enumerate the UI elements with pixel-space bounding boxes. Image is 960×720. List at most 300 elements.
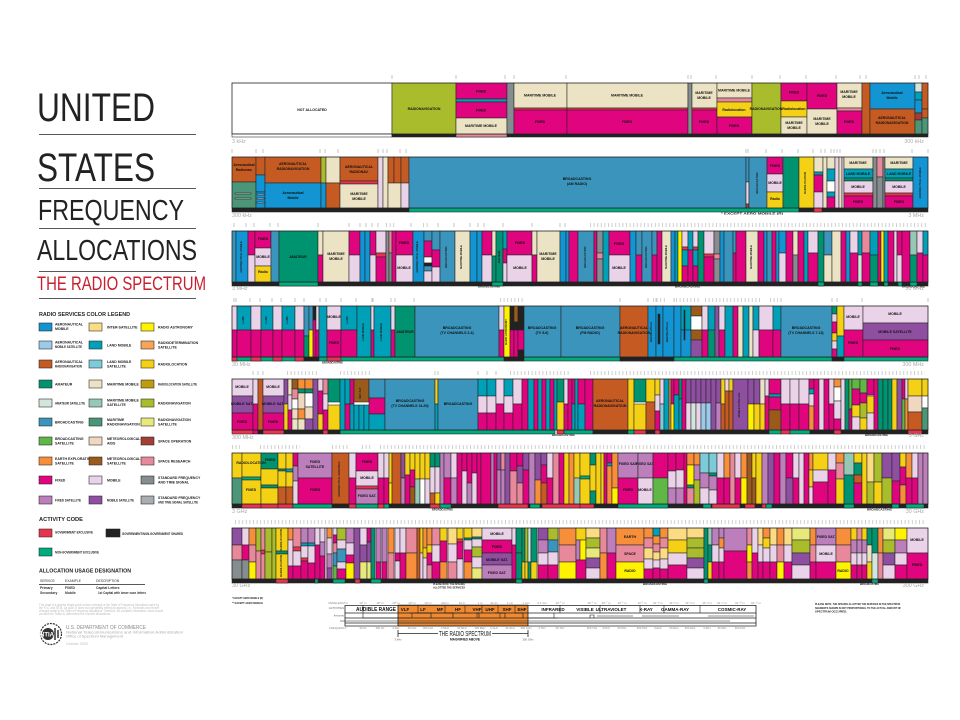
strip 6 frequency labels and notes: 30 GHz: [906, 509, 924, 515]
strip 7 labels: FIXED: [492, 545, 503, 549]
legend: radio services: EARTH EXPLORATION: [55, 457, 94, 461]
strip 4 labels: (FM RADIO): [580, 331, 600, 335]
strip 6 labels: SATELLITE: [306, 465, 325, 469]
strip 3 labels: FIXED: [399, 241, 410, 245]
strip 2 labels: Mobile: [287, 196, 299, 200]
legend: radio services: RADIONAVIGATION: [158, 418, 191, 422]
arrow end labels: 300 GHz: [522, 638, 534, 642]
logo: Department of Commerce seal: [40, 624, 62, 644]
scale tick labels: 10⁻⁹ m: [638, 601, 647, 605]
strip 7 labels: RADIOLOCATION: [279, 555, 283, 577]
disclaimer paragraph: consult the Table to determine the current allocations.: [39, 612, 111, 616]
strip 4 labels: RADIO ASTRONOMY: [504, 319, 508, 345]
legend: activity code: GOVERNMENT EXCLUSIVE: [55, 530, 94, 534]
strip 4 labels: LAND MOBILE: [361, 323, 365, 341]
strip 2 frequency labels and note: [232, 212, 924, 219]
scale tick labels: 1 cm: [507, 601, 514, 605]
strip 6 labels: MOBILE: [360, 476, 374, 480]
strip 5 labels: MOBILE SATELLITE: [737, 392, 741, 417]
scale tick labels: 100 m: [441, 601, 450, 605]
strip 1 frequency labels: 3 kHz: [232, 139, 246, 145]
strip 1 labels: Aeronautical: [881, 91, 903, 95]
scale tick labels: 3 THz: [538, 626, 546, 630]
strip 3 labels: [239, 237, 753, 274]
legend: allocation usage designation: EXAMPLE: [65, 579, 82, 583]
strip 1 labels: FIXED: [535, 120, 546, 124]
strip 6 labels: FIXED SAT.: [358, 494, 377, 498]
strip 2 labels: Radionav.: [236, 168, 252, 172]
legend: radio services: AIDS: [107, 442, 116, 446]
strip 7 labels: FIXED SAT.: [488, 571, 507, 575]
strip 1 labels: MARITIME: [813, 117, 831, 121]
strip 3 labels: MOBILE: [541, 257, 555, 261]
strip 1 labels: Radiolocation: [722, 108, 746, 112]
strip 4 labels: LAND: [345, 316, 349, 324]
strip 2 labels: LAND MOBILE: [887, 172, 912, 176]
strip 6 frequency labels and notes: 3 GHz: [232, 509, 248, 515]
strip 4 labels: FIXED: [329, 341, 340, 345]
band names: GAMMA-RAY: [661, 607, 689, 612]
strip 7 labels: MOBILE: [819, 552, 833, 556]
magnified arrow: [398, 630, 528, 637]
strip 1 labels: Radiolocation: [782, 107, 806, 111]
strip 2 labels: [233, 161, 922, 204]
legend: activity code: [39, 517, 183, 556]
strip 7 labels: MOBILE: [490, 532, 504, 536]
strip 5 labels: BROADCASTING: [444, 402, 473, 406]
disclaimer paragraph: changes made to the Table of Frequency Allocations. Therefore, for complete information, users should: [39, 609, 163, 613]
strip 6 labels: FIXED: [310, 460, 321, 464]
footnotes bottom left: [232, 596, 263, 605]
strip 4 labels: AERONAUTICAL: [665, 321, 669, 342]
strip 2 labels: FIXED: [770, 164, 781, 168]
scale tick labels: 10⁵ m: [392, 601, 400, 605]
strip 1 labels: FIXED: [844, 120, 855, 124]
activity bar: [232, 208, 409, 212]
strip 1 labels: RADIONAVIGATION: [408, 107, 441, 111]
strip 2 labels: LAND MOBILE: [846, 172, 871, 176]
scale tick labels: FREQUENCY: [329, 626, 347, 630]
scale tick labels: 10⁻⁷ m: [602, 601, 611, 605]
legend: radio services: SPACE RESEARCH: [158, 460, 191, 464]
strip 2 labels: MARITIME: [890, 161, 908, 165]
scale tick labels: 300 kHz: [423, 626, 434, 630]
strip 2 labels: BROADCASTING: [563, 177, 592, 181]
logo: Department of Commerce seal: NTIA: [40, 632, 55, 638]
legend: radio services: MARITIME: [107, 418, 125, 422]
AM broadcasting block: [409, 157, 746, 208]
strip 6 frequency labels and notes: [232, 508, 924, 515]
band names: SHF: [502, 607, 512, 612]
strip 7 labels: RADIO: [837, 569, 849, 573]
scale tick labels: 10⁻¹¹ m: [669, 601, 679, 605]
strip 3 labels: MOBILE: [397, 266, 411, 270]
scale tick labels: 10⁷ m: [359, 601, 367, 605]
legend: allocation usage designation: SERVICE: [40, 579, 56, 583]
legend heading: RADIO SERVICES COLOR LEGEND: [39, 312, 130, 318]
disclaimer paragraph: This chart is a graphic single-point-in-time portrayal of the Table of Frequency Allocations used by: [39, 603, 159, 607]
strip 4 frequency labels and notes: BROADCASTING: [322, 360, 343, 364]
strip 1 labels: MOBILE: [697, 96, 711, 100]
scale tick labels: 3 EHz: [654, 626, 662, 630]
strip 2 labels: AERONAUTICAL MOBILE: [918, 167, 922, 199]
scale tick labels: 30 Hz: [359, 626, 367, 630]
strip 7 labels: MOBILE SAT.: [486, 558, 508, 562]
legend: radio services: RADIO ASTRONOMY: [158, 326, 194, 330]
legend: radio services: SATELLITE: [55, 462, 74, 466]
strip 5 labels: MET-SAT: [358, 387, 362, 399]
strip 2 labels: BROADCASTING: [755, 172, 759, 194]
strip 1 labels: NOT ALLOCATED: [297, 108, 327, 112]
strip 2 labels: RADIOLOCATION: [803, 172, 807, 194]
explanatory note bottom right: SEGMENTS SHOWN IS NOT PROPORTIONAL TO THE ACTUAL AMOUNT OF: [815, 606, 901, 610]
legend: allocation usage designation: DESCRIPTION: [96, 579, 120, 583]
scale tick labels: 3 ZHz: [703, 626, 711, 630]
strip 4 labels: (TV CHANNELS 7-13): [788, 331, 824, 335]
arrow end labels: [394, 638, 534, 642]
strip 7 frequency labels and notes: 300 GHz: [903, 583, 924, 589]
strip 3 labels: BROADCASTING: [583, 246, 587, 268]
legend: radio services: BROADCASTING: [55, 437, 84, 441]
strip 5 labels: RADIONAVIGATION: [594, 404, 627, 408]
band names: Aeronav: [334, 614, 345, 618]
scale tick labels: 10⁻¹⁶ m: [751, 601, 762, 605]
legend: allocation usage designation: [39, 568, 146, 595]
agency credit: National Telecommunications and Information Administration: [66, 630, 183, 634]
strip 1 labels: AERONAUTICAL: [878, 116, 907, 120]
title: United: UNITED: [37, 86, 155, 130]
strip 2 labels: AERONAUTICAL: [279, 162, 308, 166]
strip 3 labels: MOBILE: [513, 266, 527, 270]
not allocated block: [232, 83, 392, 134]
strip 4 labels: [241, 312, 912, 351]
strip 1 labels: MARITIME MOBILE: [718, 88, 751, 92]
strip 1 labels: FIXED: [699, 120, 710, 124]
strip 1 labels: MARITIME MOBILE: [524, 94, 557, 98]
footnotes bottom left: * EXCEPT AERO MOBILE (R): [232, 596, 263, 600]
strip 1 labels: MARITIME: [785, 121, 803, 125]
scale tick labels: 0.1 mm: [537, 601, 547, 605]
legend: radio services: AERONAUTICAL: [55, 322, 84, 326]
scale tick labels: 1 mm: [522, 601, 530, 605]
band names: MF: [437, 607, 443, 612]
strip 3 labels: MARITIME: [327, 252, 345, 256]
strip 3 frequency labels and notes: BROADCASTING: [478, 284, 500, 288]
agency credit: U.S. DEPARTMENT OF COMMERCE: [66, 625, 147, 631]
strip 7 labels: FIXED SAT.: [817, 535, 836, 539]
legend: radio services: STANDARD FREQUENCY: [158, 496, 201, 500]
strip 4 labels: AMATEUR: [396, 330, 414, 334]
band names: VHF: [472, 607, 482, 612]
legend: radio services: MOBILE SATELLITE: [55, 345, 83, 349]
legend: radio services: MOBILE: [55, 327, 69, 331]
legend: radio services: AND TIME SIGNAL SATELLITE: [158, 500, 199, 504]
strip 1 labels: FIXED: [817, 94, 828, 98]
strip 2 labels: RADIONAVIGATION: [277, 167, 310, 171]
aeronautical radionavigation block: [620, 306, 648, 357]
strip 3 labels: Radio: [258, 270, 268, 274]
scale tick labels: 300 ZHz: [735, 626, 746, 630]
legend: radio services: RADIODETERMINATION: [158, 341, 199, 345]
scale tick labels: 10⁻¹³ m: [702, 601, 712, 605]
strip 3 frequency labels and notes: 3 MHz: [232, 286, 248, 292]
strip 2 labels: Radio: [770, 197, 780, 201]
strip 4 labels: MOBILE: [327, 315, 341, 319]
scale tick labels: 30 MHz: [457, 626, 467, 630]
strip 7: 30 GHz to 300 GHz: [232, 522, 928, 590]
scale tick labels: 30 PHz: [617, 626, 627, 630]
strip 7 labels: FIXED: [912, 563, 923, 567]
strip 6 frequency labels and notes: BROADCASTING: [867, 508, 892, 512]
strip 1 labels: FIXED: [729, 124, 740, 128]
scale tick labels: 10⁻⁶ m: [588, 601, 597, 605]
strip 7 frequency labels and notes: 30 GHz: [232, 583, 251, 589]
strip 3 frequency labels and notes: 30 MHz: [905, 286, 924, 292]
legend: radio services: SATELLITE: [55, 442, 74, 446]
legend: radio services: METEOROLOGICAL: [107, 437, 141, 441]
strip 4 labels: FIXED: [848, 341, 859, 345]
legend: radio services: RADIONAVIGATION: [55, 364, 82, 368]
band names: EHF: [518, 607, 527, 612]
strip 3 labels: BROADCASTING: [644, 246, 648, 268]
activity bar: [232, 579, 928, 583]
strip 3 labels: MOBILE: [256, 255, 270, 259]
strip 1 labels: MARITIME: [695, 91, 713, 95]
band names: VLF: [401, 607, 410, 612]
scale tick labels: 30 ZHz: [717, 626, 727, 630]
strip 1 labels: MARITIME: [840, 90, 858, 94]
strip 5 labels: FIXED: [268, 420, 279, 424]
activity bar: [232, 282, 928, 286]
legend: radio services: SATELLITE: [158, 346, 177, 350]
legend: radio services: MARITIME MOBILE: [107, 382, 140, 386]
strip 4 labels: (TV 5-6): [536, 331, 548, 335]
strip 5 frequency labels and notes: BROADCASTING: [865, 433, 888, 437]
strip 4 frequency labels and notes: 30 MHz: [232, 362, 251, 368]
strip 3 labels: MARITIME MOBILE: [664, 245, 668, 269]
scale tick labels: 1 m: [478, 601, 483, 605]
legend: radio services: MOBILE SATELLITE: [107, 498, 135, 502]
strip 2 labels: Aeronautical: [282, 191, 304, 195]
scale tick labels: 3 GHz: [490, 626, 499, 630]
scale tick labels: [328, 601, 762, 630]
scale tick labels: 30 kHz: [408, 626, 417, 630]
scale tick labels: 300 GHz: [520, 626, 532, 630]
strip 1 labels: MARITIME MOBILE: [611, 94, 644, 98]
strip 7 labels: [279, 529, 924, 577]
legend: radio services: SATELLITE: [107, 462, 126, 466]
legend: allocation usage designation: Mobile: [65, 591, 76, 595]
strip 2 labels: MOBILE: [352, 197, 366, 201]
disclaimer paragraph: [39, 603, 163, 616]
strip 4 labels: (TV CHANNELS 2-4): [440, 331, 474, 335]
legend: radio services: FIXED SATELLITE: [55, 498, 82, 502]
strip 7 labels: MOBILE: [910, 538, 924, 542]
band names: ACTIVITIES: [329, 606, 344, 610]
strip 2 labels: AERONAUTICAL: [345, 165, 374, 169]
strip 4: 30 MHz to 300 MHz: [232, 298, 928, 368]
strip 4 labels: FIXED: [890, 347, 901, 351]
magnified radio band: [398, 605, 528, 626]
legend: radio services: AND TIME SIGNAL: [158, 480, 190, 484]
explanatory note bottom right: PLEASE NOTE: THE SPACING ALLOTTED THE SERVICES IN THE SPECTRUM: [815, 602, 901, 606]
strip 1 labels: FIXED: [622, 120, 633, 124]
strip 5 labels: MOBILE SAT.: [262, 402, 284, 406]
strip 5 labels: MOBILE SAT.: [231, 402, 253, 406]
strip 5 labels: AERONAUTICAL: [596, 399, 625, 403]
strip 2 frequency labels and note: * EXCEPT AERO MOBILE (R): [721, 212, 783, 216]
scale tick labels: 10³ m: [424, 601, 432, 605]
legend: allocation usage designation: Capital Letters: [96, 586, 120, 590]
legend: allocation usage designation: Primary: [40, 586, 53, 590]
band names: [329, 606, 746, 618]
legend: radio services: FIXED: [55, 478, 66, 482]
strip 2 labels: MOBILE: [892, 185, 906, 189]
TV broadcast block: [415, 306, 499, 357]
band names: AUDIBLE RANGE: [356, 607, 397, 613]
legend: radio services: [39, 312, 201, 504]
strip 1 labels: FIXED: [789, 90, 800, 94]
legend: radio services: SPACE OPERATION: [158, 440, 192, 444]
strip 7 frequency labels and notes: ALLOTTED THE SERVICES: [433, 586, 465, 590]
strip 4 labels: MOBILE: [888, 312, 902, 316]
strip 3 labels: AERONAUTICAL MOBILE: [239, 241, 243, 273]
strip 2 labels: MOBILE: [768, 181, 782, 185]
legend: radio services: SATELLITE: [107, 364, 126, 368]
strip 1 frequency labels: [232, 139, 924, 145]
band names: ULTRAVIOLET: [596, 607, 627, 612]
strip 5 labels: MOBILE: [235, 385, 249, 389]
agency credit: [66, 625, 183, 646]
strip 5 frequency labels and notes: 3 GHz: [909, 433, 924, 439]
strip 1 labels: Mobile: [886, 96, 898, 100]
legend: allocation usage designation: Secondary: [40, 591, 57, 595]
diagram title: THE RADIO SPECTRUM: [439, 631, 491, 638]
strip 3: 3 MHz to 30 MHz: [232, 223, 928, 292]
strip 6 labels: FIXED: [362, 460, 373, 464]
legend: radio services: METEOROLOGICAL: [107, 457, 141, 461]
strip 5 frequency labels and notes: BROADCASTING: [552, 433, 575, 437]
strip 1 labels: FIXED: [476, 90, 487, 94]
explanatory note bottom right: [815, 602, 901, 614]
legend: radio services: INTER-SATELLITE: [107, 326, 138, 330]
scale tick labels: 300 PHz: [637, 626, 648, 630]
band names: COSMIC-RAY: [718, 607, 746, 612]
strip 3 labels: AMATEUR: [289, 255, 307, 259]
legend: radio services: RADIOLOCATION: [158, 362, 188, 366]
scale tick labels: 3 PHz: [602, 626, 610, 630]
scale tick labels: 30 GHz: [505, 626, 515, 630]
strip 4 labels: LAND: [285, 316, 289, 324]
strip 2 labels: MARITIME: [350, 192, 368, 196]
legend: radio services: AMATEUR SATELLITE: [55, 402, 86, 406]
strip 6 labels: FIXED: [265, 458, 276, 462]
strip 2 labels: Aeronautical: [233, 163, 255, 167]
amateur block: [279, 231, 318, 282]
title: States: STATES: [37, 146, 155, 190]
title: Allocations: ALLOCATIONS: [37, 235, 197, 267]
legend: allocation usage designation: 1st Capital with lower case letters: [98, 591, 146, 595]
scale tick labels: 300 EHz: [685, 626, 696, 630]
strip 3 labels: AERONAUTICAL MOBILE: [415, 241, 419, 273]
strip 2 labels: MARITIME: [849, 161, 867, 165]
legend: radio services: AERONAUTICAL: [55, 360, 84, 364]
strip 1 labels: [297, 88, 909, 130]
strip 5 frequency labels and notes: [232, 433, 924, 441]
scale tick labels: 10⁻¹² m: [685, 601, 695, 605]
strip 5 labels: MOBILE: [266, 385, 280, 389]
subtitle: THE RADIO SPECTRUM: [37, 273, 206, 295]
strip 4 frequency labels and notes: 300 MHz: [902, 362, 924, 368]
agency credit: Office of Spectrum Management: [66, 634, 124, 638]
band names: VISIBLE: [576, 607, 594, 612]
strip 5 labels: BROADCASTING: [396, 399, 425, 403]
legend: radio services: RADIONAVIGATION: [107, 422, 140, 426]
strip 4 labels: AERONAUTICAL: [649, 321, 653, 342]
legend: radio services: RADIONAVIGATION: [158, 402, 191, 406]
activity bar: [232, 504, 928, 508]
scale tick labels: 10⁻⁵ m: [556, 601, 565, 605]
agency credit: October 2003: [66, 642, 88, 646]
strip 7 labels: RADIO: [624, 569, 636, 573]
scale tick labels: 10⁴ m: [408, 601, 416, 605]
scale tick labels: 10 m: [459, 601, 466, 605]
legend: radio services: AMATEUR: [55, 382, 73, 386]
strip 4 labels: BROADCASTING: [576, 326, 605, 330]
scale tick labels: 10⁻¹⁵ m: [735, 601, 746, 605]
arrow end labels: 3 kHz: [394, 638, 402, 642]
footnotes bottom left: ** EXCEPT AERO MOBILE: [232, 601, 263, 605]
legend: radio services: LAND MOBILE: [107, 344, 132, 348]
strip 6 labels: FIXED SAT.: [636, 462, 655, 466]
strip 3 labels: FIXED: [258, 237, 269, 241]
strip 3 frequency labels and notes: BROADCASTING: [675, 284, 700, 288]
strip 3 frequency labels and notes: [232, 284, 925, 292]
activity bar: [232, 357, 928, 361]
band names: LF: [420, 607, 426, 612]
scale tick labels: 30 THz: [556, 626, 565, 630]
strip 6 labels: FIXED: [310, 488, 321, 492]
strip 7 labels: EARTH: [624, 535, 636, 539]
strip 1 labels: MOBILE: [842, 95, 856, 99]
strip 3 labels: AMATEUR: [497, 250, 501, 263]
strip 1 labels: MOBILE: [787, 126, 801, 130]
aeronautical radionavigation block: [593, 379, 628, 430]
strip 4 labels: BROADCASTING: [528, 326, 557, 330]
scale tick labels: 10⁻⁸ m: [618, 601, 627, 605]
strip 4 labels: LAND: [264, 316, 268, 324]
scale tick labels: 300 Hz: [376, 626, 385, 630]
strip 6: 3 GHz to 30 GHz: [232, 447, 928, 515]
band names: HF: [455, 607, 461, 612]
strip 2 frequency labels and note: 300 kHz: [232, 213, 252, 219]
legend: activity code: NON-GOVERNMENT EXCLUSIVE: [55, 550, 100, 554]
strip 4 labels: MOBILE: [846, 315, 860, 319]
legend: radio services: SATELLITE: [158, 422, 177, 426]
scale tick labels: 10⁶ m: [376, 601, 384, 605]
legend: radio services: RADIOLOCATION SATELLITE: [158, 382, 198, 386]
strip 3 labels: MARITIME: [539, 252, 557, 256]
strip 2 frequency labels and note: 3 MHz: [908, 213, 924, 219]
strip 2 labels: (AM RADIO): [567, 182, 587, 186]
strip 7 frequency labels and notes: [232, 582, 924, 590]
title: Frequency: FREQUENCY: [38, 195, 184, 227]
strip 1 labels: MOBILE: [815, 122, 829, 126]
strip 6 labels: [236, 458, 655, 498]
strip 1 labels: FIXED: [476, 108, 487, 112]
legend: activity code: GOVERNMENT/NON-GOVERNMENT SHARED: [122, 532, 183, 536]
strip 6 labels: FIXED SAT.: [619, 462, 638, 466]
